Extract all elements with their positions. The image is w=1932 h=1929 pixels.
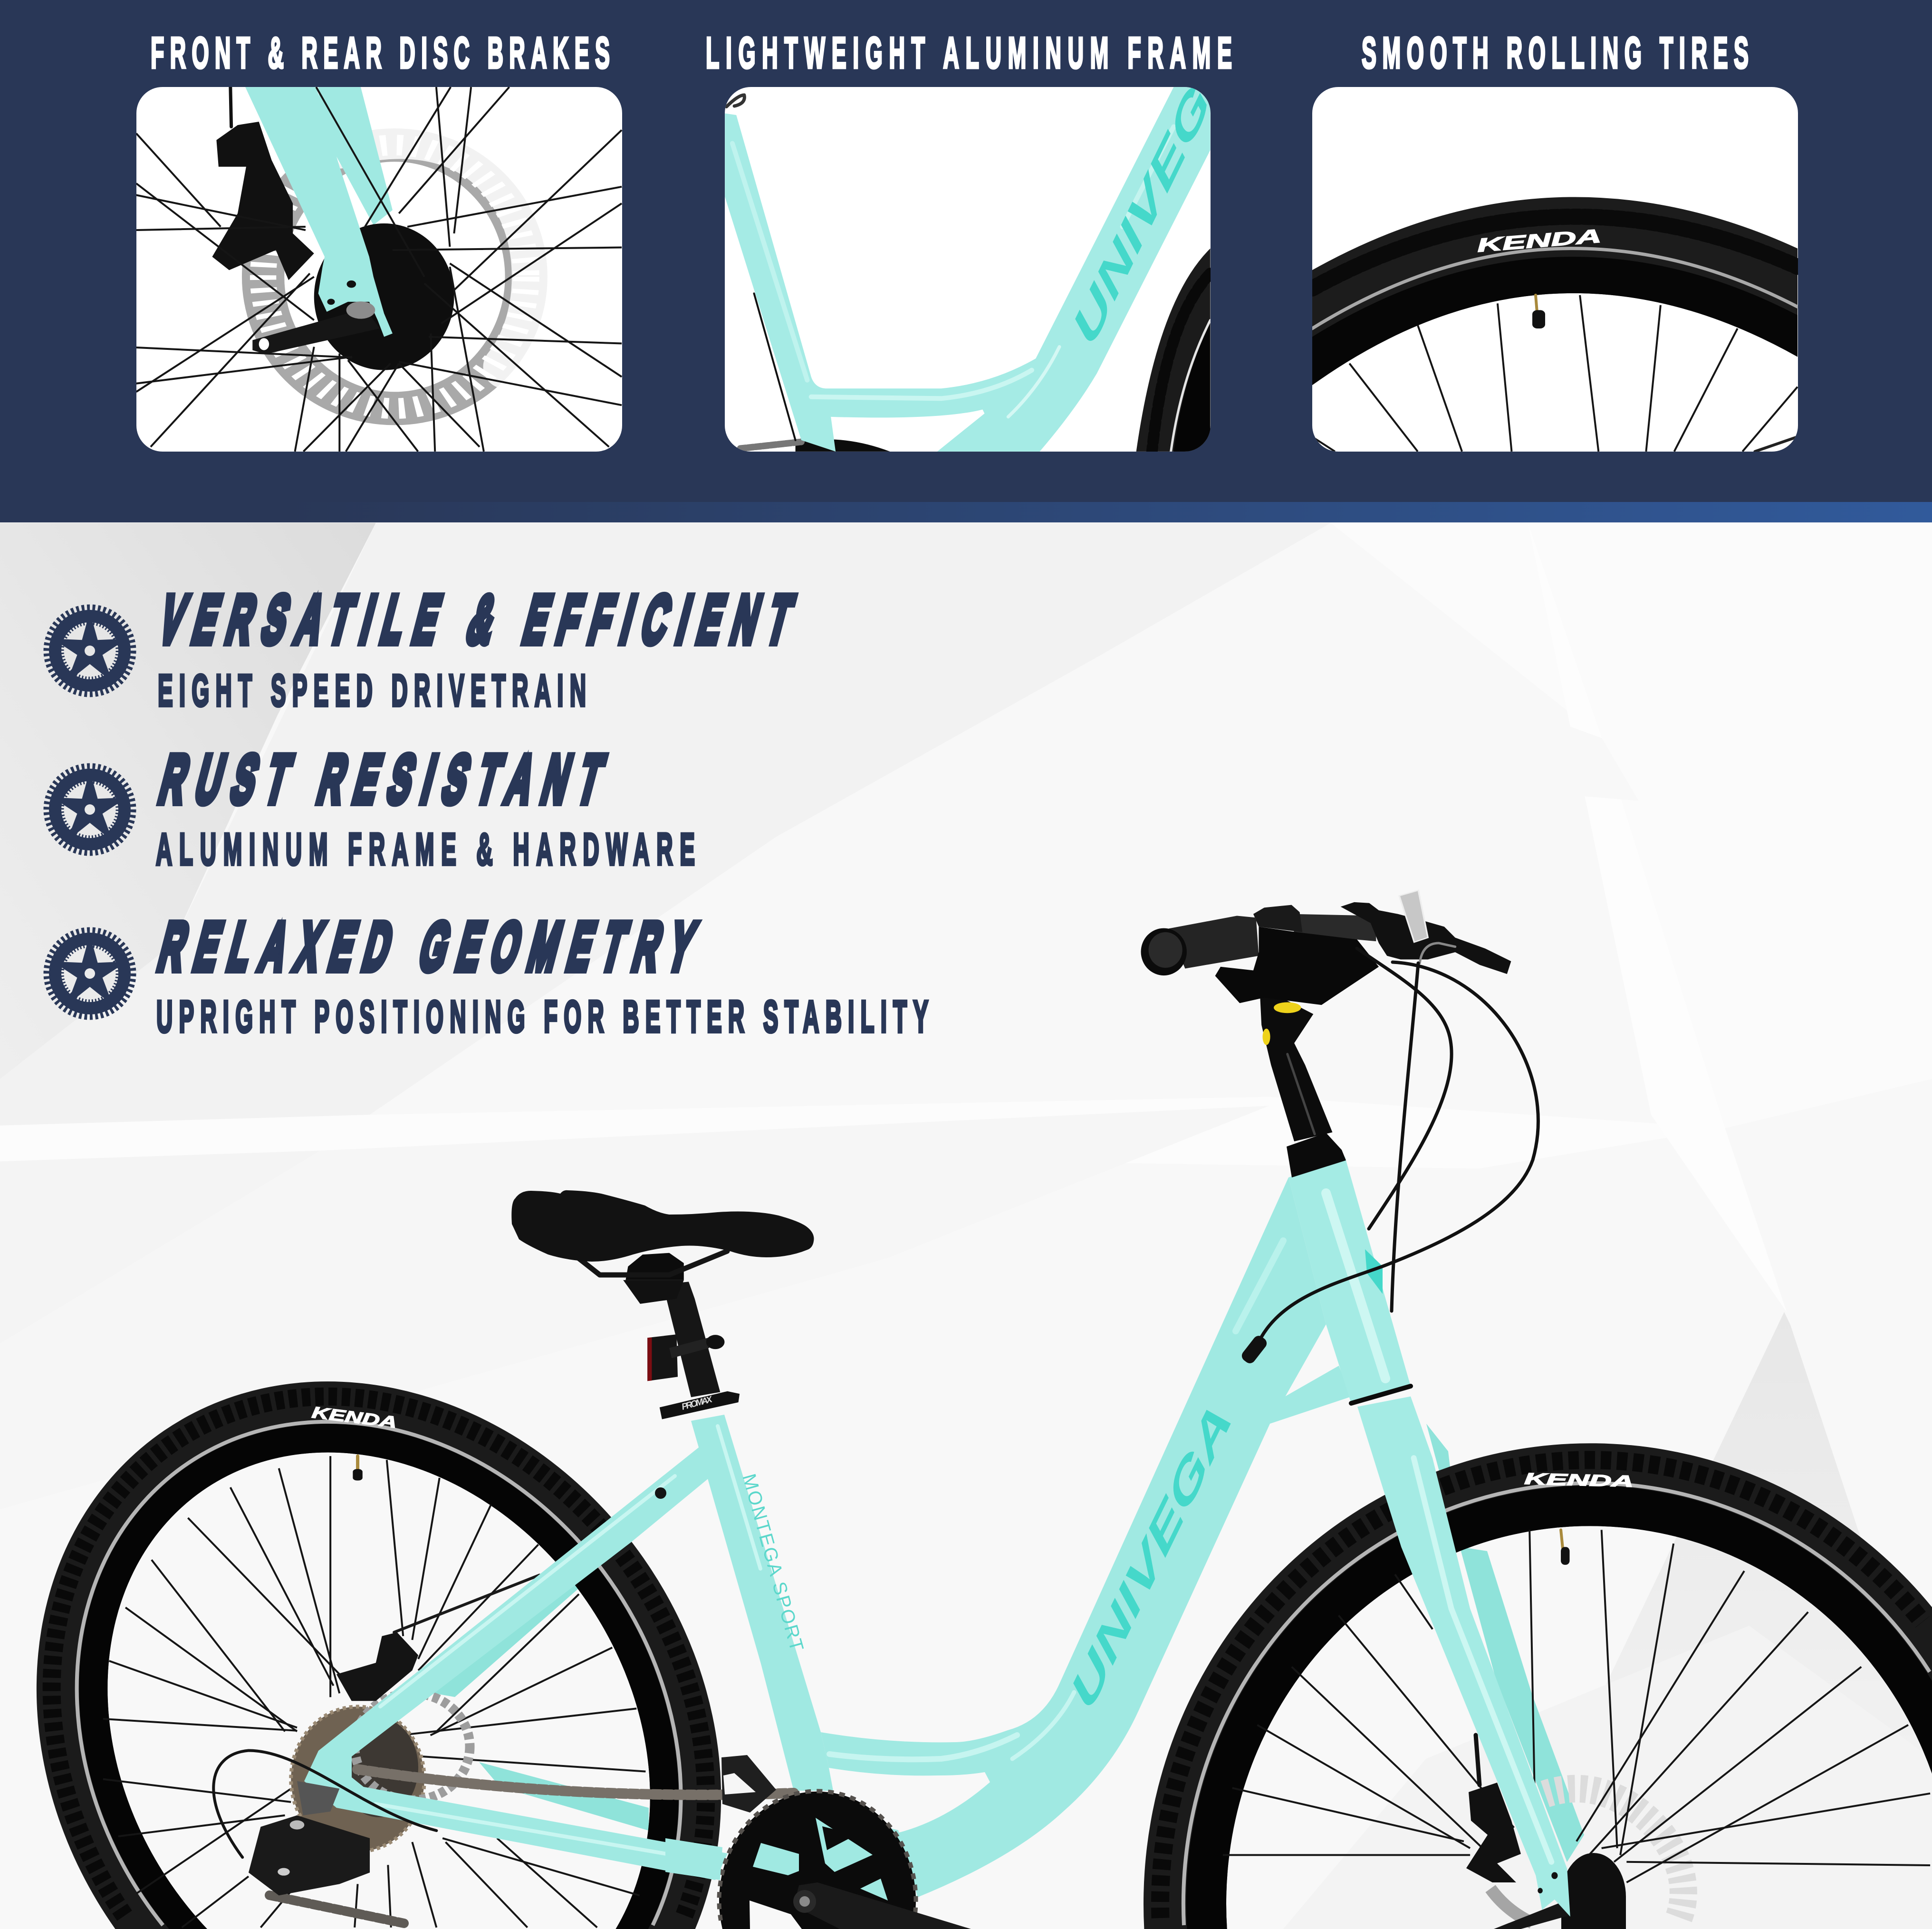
front fork and hub over wheel (1357, 1397, 1626, 1929)
quick release slot (259, 338, 269, 350)
frame highlights (732, 127, 1173, 417)
rear rim (79, 1424, 679, 1929)
grip (1169, 916, 1259, 969)
seat tube highlight (718, 1426, 760, 1569)
panel: tire photo (1312, 87, 1798, 452)
front rotor (1545, 1789, 1683, 1920)
saddle and seat post (511, 1190, 814, 1419)
pedal (721, 1755, 776, 1813)
brace (1270, 1366, 1351, 1424)
header band background (0, 0, 1932, 502)
rear brake cable (394, 1575, 539, 1632)
derailleur (213, 1751, 436, 1895)
stay bolt (655, 1487, 666, 1499)
chainring teeth (719, 1791, 916, 1920)
stem highlight (1288, 1054, 1315, 1134)
chainring lower window (750, 1900, 802, 1929)
feature: relaxed geometry (47, 909, 928, 1042)
front fork blade (245, 87, 393, 337)
gradient stripe under header (0, 502, 1932, 522)
second seat stay behind wheel (433, 1575, 594, 1697)
rear fork blade (318, 87, 393, 225)
grip end (1141, 928, 1187, 975)
feature title: VERSATILE & EFFICIENT (152, 582, 800, 657)
silver lever (1420, 943, 1455, 963)
stem decals (1263, 1002, 1301, 1045)
head tube (1288, 1157, 1411, 1403)
stem (1260, 996, 1332, 1141)
lower panel background with faceted polygons (0, 522, 1932, 1929)
icon: chainring gear (47, 608, 133, 694)
disc rotor (263, 137, 534, 408)
pedal gap (723, 1773, 756, 1794)
stay highlights (375, 1476, 708, 1861)
chainring (719, 1792, 916, 1929)
spokes and valve (1312, 295, 1797, 452)
feature description: UPRIGHT POSITIONING FOR BETTER STABILITY (156, 991, 928, 1042)
clamp brand text: PROMAX (681, 1394, 714, 1412)
feature description: ALUMINUM FRAME & HARDWARE (156, 824, 695, 874)
rear tire brand: KENDA (311, 1403, 398, 1432)
bar (1291, 914, 1376, 941)
rear tread (52, 1397, 706, 1916)
main frame (821, 1177, 1326, 1897)
front sidewall stripe (1183, 1483, 1930, 1925)
rear disc rotor (355, 1693, 470, 1800)
quick release arm (1494, 1901, 1568, 1929)
second chain stay behind wheel (479, 1762, 649, 1831)
handlebar and controls (1141, 890, 1511, 1141)
feature: rust resistant (47, 742, 695, 874)
seat tube shadow line (754, 293, 796, 440)
reflector (1399, 890, 1428, 942)
dropout details (327, 280, 375, 319)
downtube logo: UNIVEGA (1062, 1391, 1240, 1720)
panel: disc brake photo (136, 87, 622, 452)
cable stop (1240, 1333, 1269, 1366)
bar clamp left (1253, 905, 1302, 932)
head tube highlight (1326, 1193, 1385, 1379)
seat tube (691, 1415, 833, 1791)
chain (269, 1769, 794, 1923)
cassette (291, 1707, 424, 1852)
front rim (1186, 1486, 1932, 1929)
frame underlay behind chainring (753, 1811, 917, 1899)
icon: chainring gear (47, 931, 133, 1016)
crank arm (794, 1882, 971, 1929)
front spokes (1223, 1530, 1930, 1882)
tire and rim (1312, 197, 1797, 385)
rear sidewall stripe (77, 1422, 681, 1925)
headset (1287, 1133, 1346, 1177)
brake cable (1476, 1735, 1480, 1785)
chainring windows (753, 1818, 888, 1900)
brake and shifter cables (1257, 948, 1538, 1345)
shifter and lever cluster (1215, 927, 1379, 1005)
front tire (1144, 1443, 1932, 1929)
drivetrain rear (291, 1575, 539, 1852)
front tire brand: KENDA (1524, 1470, 1634, 1491)
drivetrain front: chainring and crank (665, 1791, 971, 1929)
feature title: RUST RESISTANT (153, 742, 611, 817)
hub (314, 223, 454, 370)
rear brake caliper (336, 1632, 418, 1701)
brake caliper (1466, 1783, 1521, 1882)
saddle rails (577, 1251, 727, 1275)
icon: chainring gear (47, 767, 133, 852)
lower rotor (1490, 1889, 1532, 1923)
rear tire (37, 1381, 721, 1929)
seat tube model text: MONTEGA SPORT (738, 1472, 807, 1653)
chainring sticker (822, 1826, 849, 1850)
grip end cap (1149, 932, 1182, 968)
seat post (623, 1253, 720, 1397)
crank bolt center (799, 1896, 810, 1907)
chainstay end into chainring (665, 1838, 722, 1880)
rear light and clamp (647, 1334, 740, 1419)
quick release arm (252, 321, 328, 353)
panel: aluminum frame photo (725, 27, 1241, 452)
crank bolt (793, 1890, 816, 1913)
front wheel with tire and spokes (1144, 1443, 1932, 1929)
heading: lightweight aluminum frame: LIGHTWEIGHT ALUMINUM FRAME (706, 28, 1232, 77)
frame tubes (725, 87, 1211, 452)
right controls (1341, 902, 1511, 974)
front blade (1357, 1397, 1570, 1917)
cable stop (726, 95, 744, 106)
brake caliper (212, 122, 314, 280)
heading: front and rear disc brakes: FRONT & REAR DISC BRAKES (151, 28, 610, 77)
head tube logo mark (1365, 1249, 1383, 1294)
frame highlights (829, 1241, 1283, 1759)
feature description: EIGHT SPEED DRIVETRAIN (158, 665, 586, 715)
heading: smooth rolling tires: SMOOTH ROLLING TIRES (1362, 28, 1749, 77)
feature: versatile and efficient (47, 582, 800, 715)
rear wheel (37, 1381, 721, 1929)
rear fork blade behind front wheel (1426, 1424, 1584, 1862)
tire brand text: KENDA (1476, 226, 1602, 256)
seat stay and chain stay (304, 1444, 728, 1880)
spokes (136, 87, 622, 452)
crown ring (1351, 1386, 1411, 1403)
tire in frame crop (1136, 249, 1211, 452)
front hub (1561, 1853, 1626, 1929)
bicycle illustration (37, 1157, 1584, 1929)
frame logo text: UNIVEGA (1064, 27, 1241, 356)
rear spokes (103, 1456, 645, 1928)
chain and chainring (740, 439, 890, 452)
front tread (1160, 1460, 1922, 1918)
saddle (511, 1190, 814, 1262)
feature title: RELAXED GEOMETRY (152, 909, 702, 984)
